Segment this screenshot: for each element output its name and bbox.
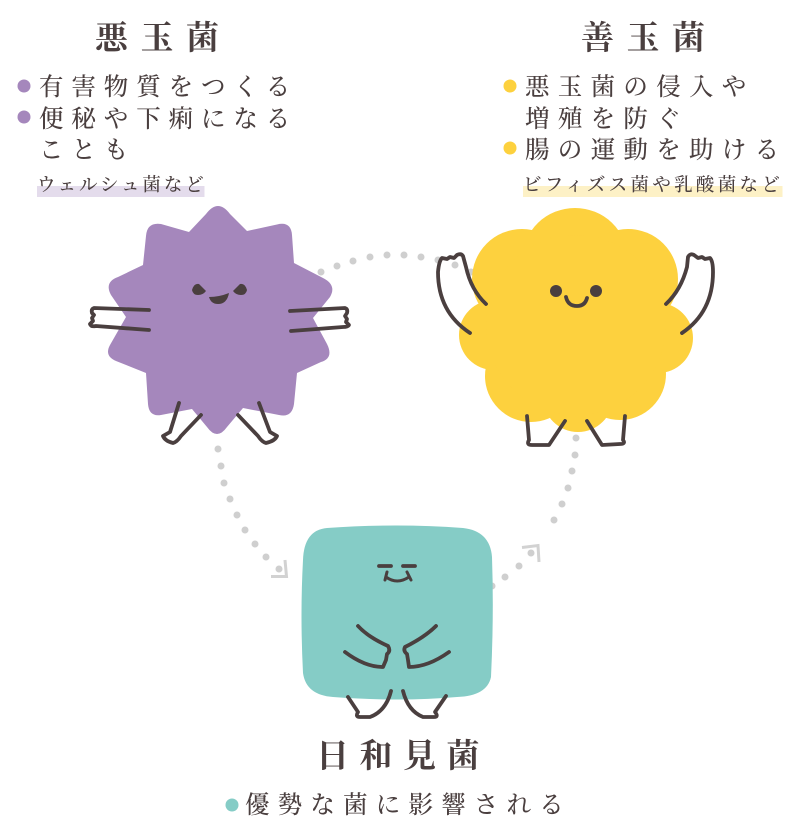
legs xyxy=(527,416,625,445)
legs xyxy=(163,403,277,443)
heading: neutral bacteria: 日和見菌 xyxy=(316,738,490,775)
character: yellow good bacterium xyxy=(438,208,713,445)
heading: good bacteria: 善玉菌 xyxy=(581,20,718,57)
arms xyxy=(345,626,449,667)
example label: bad bacteria: ウェルシュ菌など xyxy=(37,175,207,196)
character: purple bad bacterium xyxy=(90,206,349,443)
bullet: neutral bacteria: 優勢な菌に影響される xyxy=(245,791,572,819)
dotted arrow: bad to neutral xyxy=(214,446,286,576)
example label: good bacteria: ビフィズス菌や乳酸菌など xyxy=(523,175,783,196)
bullet list: bad bacteria: 有害物質をつくる xyxy=(39,73,298,101)
panel: bad bacteria xyxy=(18,20,349,443)
legs xyxy=(348,691,446,717)
bullet list: bad bacteria: 便秘や下痢になる xyxy=(39,105,298,133)
bullet list: bad bacteria: ことも xyxy=(39,137,136,164)
panel: good bacteria xyxy=(438,20,787,445)
bullet list: good bacteria: 腸の運動を助ける xyxy=(525,136,787,164)
dotted arrow: good to neutral xyxy=(488,434,580,590)
face xyxy=(379,566,415,581)
dotted arrow: bad to good xyxy=(318,252,474,276)
bullet list: good bacteria: 増殖を防ぐ xyxy=(525,105,689,133)
face xyxy=(550,285,602,306)
character: teal neutral bacterium xyxy=(302,526,493,717)
bullet list: bad bacteria xyxy=(18,73,298,164)
arms xyxy=(438,254,713,333)
face xyxy=(192,284,247,304)
bullet list: good bacteria: 悪玉菌の侵入や xyxy=(525,73,755,101)
bullet list: good bacteria xyxy=(504,73,787,164)
heading: bad bacteria: 悪玉菌 xyxy=(95,20,232,57)
arms xyxy=(90,308,349,331)
panel: neutral bacteria xyxy=(226,526,572,819)
